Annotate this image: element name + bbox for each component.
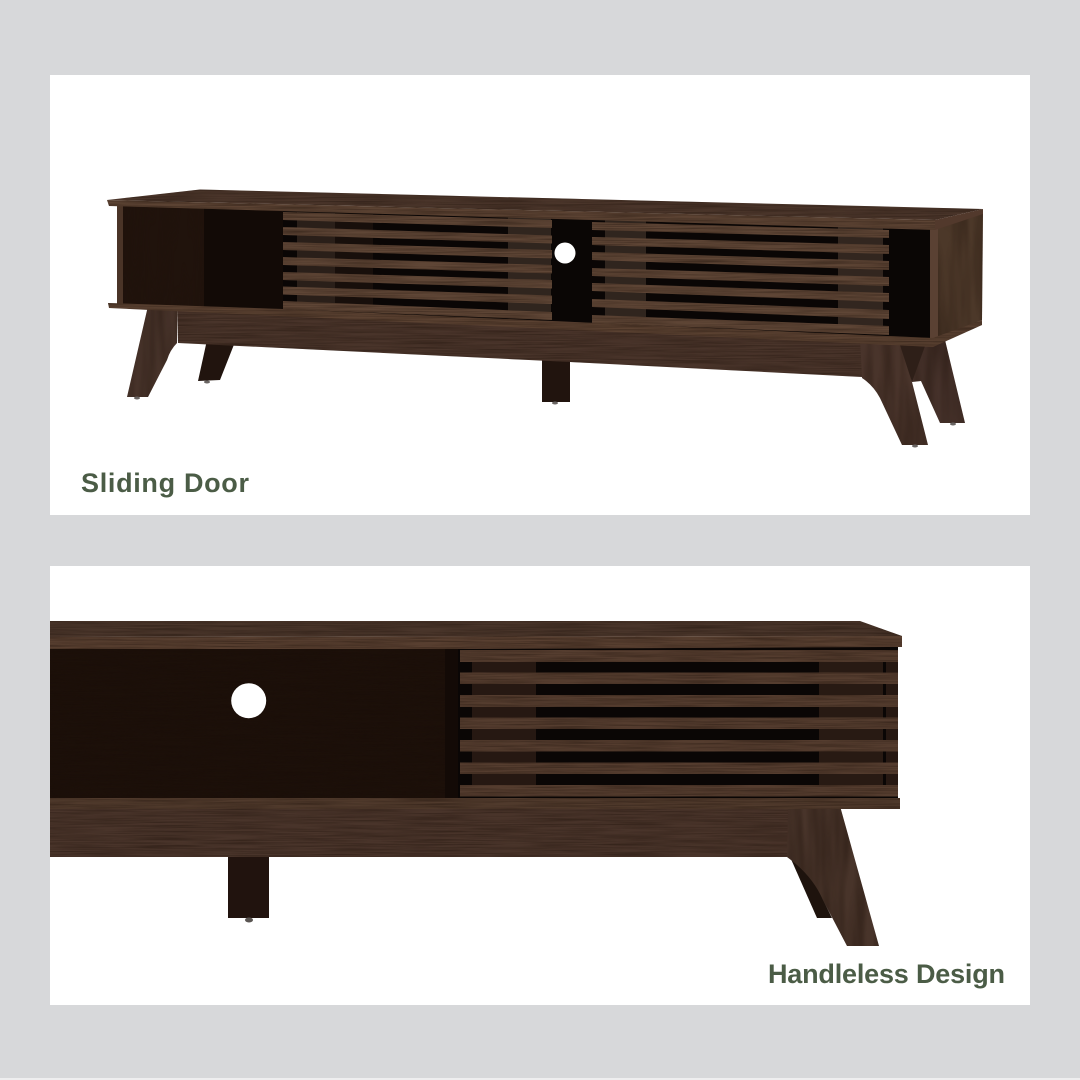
back right leg — [902, 340, 965, 423]
leg foot — [245, 918, 253, 922]
base apron — [50, 806, 789, 857]
top front edge — [107, 200, 935, 230]
door shadow bands — [472, 655, 898, 790]
front left leg — [127, 306, 177, 397]
left end post — [117, 204, 124, 305]
right end strip — [930, 227, 938, 340]
leg feet — [134, 380, 956, 448]
right door shadow bands — [605, 220, 883, 334]
panel: handleless design — [50, 566, 1030, 1005]
left door slats — [283, 212, 552, 320]
door slats — [460, 650, 898, 796]
middle leg — [228, 855, 269, 918]
middle leg — [542, 358, 570, 402]
leg shadow — [900, 345, 925, 382]
left door shadow bands — [297, 212, 551, 320]
top front edge — [50, 636, 902, 649]
front leg — [787, 806, 879, 946]
product image: full TV console — [107, 190, 983, 448]
door backing — [458, 647, 898, 800]
top surface — [50, 621, 902, 637]
front right leg — [860, 340, 928, 445]
compartment side wall — [445, 647, 458, 800]
open left compartment — [123, 204, 285, 312]
back leg — [787, 850, 832, 918]
top surface — [107, 190, 983, 220]
label: Handleless Design: Handleless Design — [768, 959, 1005, 989]
right door slats — [592, 222, 889, 335]
panel: sliding door — [50, 75, 1030, 515]
label: Sliding Door: Sliding Door — [81, 468, 249, 498]
door backing — [283, 208, 930, 340]
bottom shelf — [108, 303, 982, 347]
back left leg — [198, 340, 235, 381]
cable hole — [554, 242, 576, 264]
side panel — [934, 213, 983, 340]
cable hole — [231, 683, 266, 718]
top right edge — [935, 209, 983, 230]
base apron — [177, 308, 862, 377]
open compartment — [50, 647, 458, 800]
bottom shelf — [50, 798, 900, 809]
product image: console close-up — [50, 621, 902, 946]
